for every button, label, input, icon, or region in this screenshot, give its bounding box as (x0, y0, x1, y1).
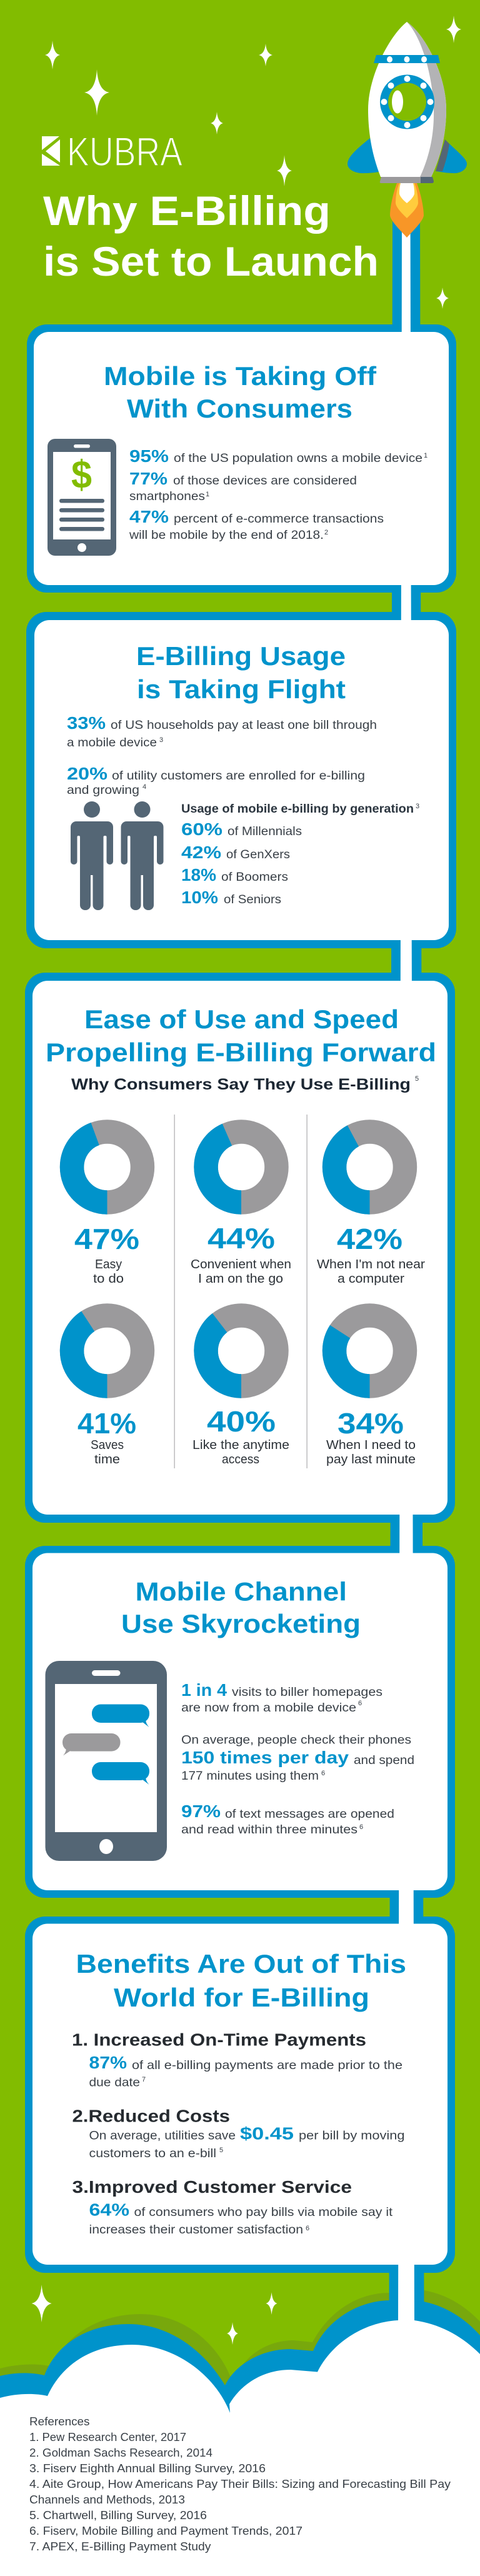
panel: ease of use (25, 973, 455, 1523)
heading: Use Skyrocketing (121, 1609, 361, 1638)
heading (46, 1005, 436, 1067)
donut: 42% not near a computer: 42% (337, 1223, 402, 1255)
stats text: smartphones (129, 489, 205, 503)
rocket exhaust trail: white gaps between panels (398, 213, 414, 2325)
panel: mobile channel (25, 1546, 455, 1898)
icon: person left (71, 801, 113, 910)
heading: Ease of Use and Speed (84, 1005, 399, 1034)
stats text: 97% (181, 1802, 221, 1821)
donut: 44% convenient: 44% (208, 1222, 275, 1255)
benefit 1: 87% (89, 2053, 127, 2072)
stats text: 33% (67, 713, 106, 733)
stats text: and spend (354, 1753, 414, 1767)
references: 7. APEX, E-Billing Payment Study (29, 2540, 211, 2553)
heading: is Taking Flight (137, 674, 346, 704)
donut: 47% easy to do: Easy (95, 1258, 122, 1271)
porthole (380, 75, 434, 129)
stats text: of US households pay at least one bill through (111, 718, 377, 732)
stats text: of those devices are considered (173, 474, 357, 488)
stats text: 2 (324, 529, 328, 536)
rocket exhaust trail: blue (389, 213, 424, 2313)
references: References (29, 2415, 90, 2428)
benefit 3: 64% (89, 2200, 129, 2219)
benefit 3: of consumers who pay bills via mobile say it (134, 2205, 393, 2219)
generation stats: of Boomers (221, 870, 288, 884)
right fin (436, 144, 467, 173)
stats text: will be mobile by the end of 2018. (129, 528, 324, 542)
stats text: 1 (206, 491, 209, 498)
generation stats: 60% (181, 819, 222, 839)
references: 6. Fiserv, Mobile Billing and Payment Trends, 2017 (29, 2525, 302, 2537)
stats text (129, 446, 428, 542)
generation stats: of Seniors (224, 893, 281, 906)
logo: KUBRA: KUBRA (67, 129, 183, 174)
generation stats: Usage of mobile e-billing by generation (181, 803, 414, 816)
benefit 1: due date (89, 2075, 140, 2089)
benefit 3 (72, 2177, 393, 2237)
references (29, 2415, 451, 2553)
generation stats: of GenXers (226, 848, 290, 861)
donut: 47% easy to do: to do (93, 1272, 124, 1286)
donut: 41% saves time: 41% (78, 1407, 136, 1440)
donut: 41% saves time (72, 1316, 142, 1466)
donut: 42% not near a computer (317, 1132, 425, 1286)
stats text: and read within three minutes (181, 1823, 358, 1837)
stats text: of text messages are opened (225, 1807, 394, 1821)
donut: 40% anytime access: access (222, 1453, 259, 1466)
stats text: of utility customers are enrolled for e-billing (112, 769, 365, 783)
stats text: 20% (67, 764, 108, 783)
heading: World for E-Billing (114, 1983, 369, 2012)
donut: 47% easy to do (72, 1132, 142, 1286)
benefit 3: increases their customer satisfaction (89, 2223, 303, 2237)
benefit 2: customers to an e-bill (89, 2147, 216, 2160)
references: Channels and Methods, 2013 (29, 2493, 185, 2506)
heading (104, 361, 377, 423)
left fin (348, 138, 379, 173)
stats text: 6 (359, 1823, 363, 1831)
stats text: 1 in 4 (181, 1680, 227, 1700)
stats text: 95% (129, 446, 169, 466)
stats text: 1 (424, 452, 428, 459)
icon: rocket (348, 22, 467, 238)
stats text: are now from a mobile device (181, 1701, 356, 1715)
references: 5. Chartwell, Billing Survey, 2016 (29, 2509, 207, 2522)
benefit 3: 3.Improved Customer Service (72, 2177, 352, 2197)
donut: 34% pay last minute: pay last minute (326, 1453, 416, 1466)
benefit 2 (72, 2107, 405, 2160)
heading: Benefits Are Out of This (76, 1949, 406, 1978)
stats text (181, 1680, 414, 1837)
benefit 2: 2.Reduced Costs (72, 2107, 230, 2125)
donut: 44% convenient: I am on the go (198, 1272, 283, 1286)
flame (390, 183, 424, 238)
title: is Set to Launch (43, 238, 379, 284)
generation stats: 10% (181, 888, 218, 907)
stats text: 77% (129, 469, 168, 488)
generation stats (181, 803, 419, 907)
benefit 1 (72, 2030, 402, 2089)
generation stats: 18% (181, 865, 216, 885)
generation stats: of Millennials (228, 824, 302, 838)
rocket body (368, 22, 446, 177)
stats text: of the US population owns a mobile device (174, 451, 422, 465)
references: 3. Fiserv Eighth Annual Billing Survey, 2016 (29, 2462, 266, 2475)
icon: person right (121, 801, 164, 910)
heading: Mobile is Taking Off (104, 361, 377, 391)
stats text: 3 (159, 736, 163, 744)
donut: 34% pay last minute: When I need to (326, 1438, 416, 1452)
benefit 2: On average, utilities save (89, 2129, 236, 2143)
benefit 3: 6 (306, 2225, 309, 2232)
generation stats: 42% (181, 843, 221, 862)
donut: 44% convenient: Convenient when (191, 1258, 291, 1271)
rocket band (374, 55, 440, 63)
stats text: 6 (358, 1700, 362, 1707)
donut: 34% pay last minute (326, 1316, 416, 1466)
subheading: 5 (415, 1075, 419, 1083)
heading: Propelling E-Billing Forward (46, 1038, 436, 1067)
panel: mobile is taking off (27, 324, 456, 593)
stats text: 6 (321, 1770, 325, 1777)
references: 4. Aite Group, How Americans Pay Their Bills: Sizing and Forecasting Bill Pay (29, 2478, 451, 2490)
cloud: white (0, 2320, 480, 2576)
donut: 44% convenient (191, 1132, 291, 1286)
stats text: and growing (67, 783, 139, 797)
stats text: percent of e-commerce transactions (174, 512, 384, 526)
benefit 1: 7 (142, 2076, 146, 2083)
stats text: 177 minutes using them (181, 1769, 319, 1783)
stats text: 150 times per day (181, 1748, 349, 1767)
icon: phone with dollar: $ (71, 453, 92, 497)
rocket base (380, 177, 434, 183)
heading (76, 1949, 406, 2012)
donut: 40% anytime access (192, 1316, 289, 1466)
heading: Mobile Channel (135, 1576, 347, 1606)
icon: phone with chat bubbles (45, 1661, 167, 1861)
icon: phone with dollar (48, 439, 116, 556)
donut: 40% anytime access: 40% (207, 1405, 276, 1438)
heading (121, 1576, 361, 1638)
donut: 41% saves time: Saves (91, 1438, 124, 1452)
cloud band: blue (0, 2300, 480, 2438)
benefit 2: $0.45 (240, 2124, 294, 2143)
stats text: visits to biller homepages (232, 1685, 382, 1699)
stats text: 4 (142, 783, 146, 791)
heading: E-Billing Usage (136, 641, 346, 671)
heading: With Consumers (127, 394, 352, 423)
title (43, 188, 379, 284)
panel: e-billing usage (26, 612, 456, 948)
heading (136, 641, 346, 704)
donut: 40% anytime access: Like the anytime (192, 1438, 289, 1452)
references: 2. Goldman Sachs Research, 2014 (29, 2447, 212, 2459)
donut: 47% easy to do: 47% (74, 1223, 139, 1255)
donut: 42% not near a computer: When I'm not near (317, 1258, 425, 1271)
benefit 2: per bill by moving (299, 2129, 405, 2143)
panel: benefits (25, 1917, 455, 2273)
stats text: 47% (129, 507, 169, 526)
benefit 1: 1. Increased On-Time Payments (72, 2030, 366, 2049)
stats text: On average, people check their phones (181, 1733, 411, 1747)
right fin shade (436, 139, 449, 171)
cloud shadow (0, 2290, 480, 2438)
references: 1. Pew Research Center, 2017 (29, 2431, 186, 2443)
donut: 42% not near a computer: a computer (338, 1272, 404, 1286)
rocket body shade (407, 22, 446, 177)
donut: 41% saves time: time (94, 1453, 120, 1466)
title: Why E-Billing (43, 188, 331, 234)
donut: 34% pay last minute: 34% (338, 1407, 404, 1440)
subheading: Why Consumers Say They Use E-Billing (71, 1076, 411, 1093)
generation stats: 3 (416, 803, 419, 810)
benefit 1: of all e-billing payments are made prior to the (132, 2058, 402, 2072)
benefit 2: 5 (219, 2147, 223, 2154)
stats text (67, 713, 377, 797)
stats text: a mobile device (67, 736, 157, 749)
